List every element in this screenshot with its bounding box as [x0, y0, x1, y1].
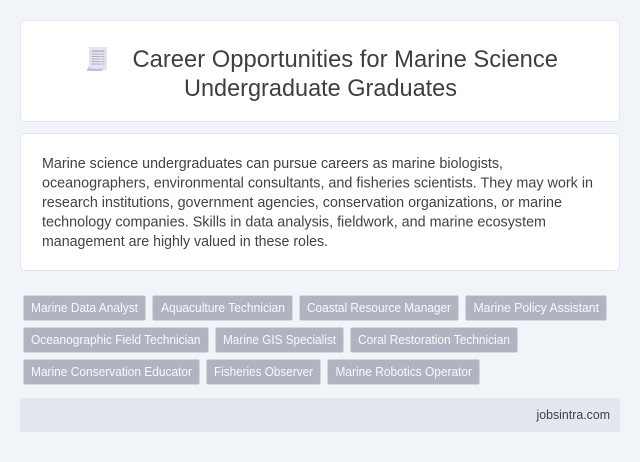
- tag: Marine GIS Specialist: [216, 328, 344, 352]
- tag: Fisheries Observer: [206, 360, 320, 384]
- tag: Coral Restoration Technician: Coral Restoration Technician: [358, 333, 510, 347]
- tag: Marine Data Analyst: Marine Data Analyst: [31, 301, 139, 315]
- tag: Aquaculture Technician: [152, 296, 292, 320]
- text block: description: technology companies. Skills in data analysis, fieldwork, and marine ecosystem: [42, 214, 546, 230]
- tag: Oceanographic Field Technician: Oceanographic Field Technician: [31, 333, 201, 347]
- text block: description: management are highly valued in these roles.: [42, 233, 328, 250]
- tag: Marine Robotics Operator: Marine Robotics Operator: [336, 365, 472, 379]
- tag: Marine Robotics Operator: [328, 360, 480, 384]
- tag: Coastal Resource Manager: Coastal Resource Manager: [307, 301, 451, 315]
- tag: Fisheries Observer: Fisheries Observer: [214, 365, 313, 379]
- tag: Oceanographic Field Technician: [24, 328, 208, 352]
- tag: Coral Restoration Technician: [350, 328, 518, 352]
- text block: description: Marine science undergraduates can pursue careers as marine biologists,: [42, 155, 503, 172]
- text block: description: research institutions, government agencies, conservation organizations, or marine: [42, 194, 562, 211]
- panel: header card: [20, 20, 620, 122]
- tag: Coastal Resource Manager: [300, 296, 458, 320]
- footer source text: jobsintra.com: [536, 408, 610, 422]
- tag: Marine Policy Assistant: Marine Policy Assistant: [474, 301, 600, 315]
- tag: Marine GIS Specialist: Marine GIS Specialist: [223, 333, 336, 347]
- tag: Aquaculture Technician: Aquaculture Technician: [161, 301, 285, 315]
- title: [132, 46, 558, 102]
- panel: description card: [20, 134, 620, 270]
- title: Undergraduate Graduates: [184, 75, 457, 102]
- tag: Marine Conservation Educator: [24, 360, 200, 384]
- tag: Marine Conservation Educator: Marine Conservation Educator: [31, 365, 192, 379]
- text block: description: [42, 155, 593, 250]
- icon: document scroll: [87, 47, 107, 71]
- tag list: [24, 296, 606, 384]
- tag: Marine Policy Assistant: [466, 296, 606, 320]
- footer bar: [20, 398, 620, 432]
- tag: Marine Data Analyst: [24, 296, 146, 320]
- text block: description: oceanographers, environmental consultants, and fisheries scientists. They may work in: [42, 174, 593, 192]
- title: Career Opportunities for Marine Science: [132, 46, 558, 73]
